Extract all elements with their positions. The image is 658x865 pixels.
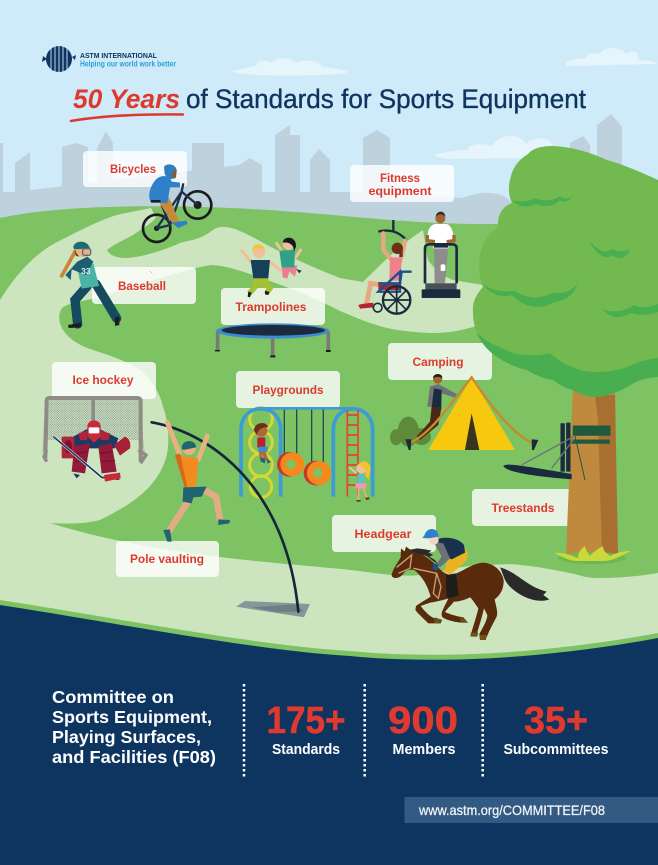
trampoline bbox=[215, 323, 331, 357]
label: Baseball: Baseball bbox=[118, 279, 166, 293]
label: Pole vaulting bbox=[116, 541, 219, 577]
baseball batter bbox=[62, 242, 153, 328]
treadmill runner bbox=[422, 212, 460, 298]
grass hill bbox=[0, 206, 658, 670]
committee name: Committee on bbox=[52, 687, 174, 707]
pole vault pole and mat bbox=[152, 422, 310, 617]
title bbox=[71, 84, 586, 121]
horse body bbox=[392, 547, 504, 639]
light walking path bbox=[0, 208, 658, 670]
pole vaulter bbox=[163, 423, 230, 542]
foliage bbox=[473, 146, 658, 397]
children jumping bbox=[242, 238, 302, 297]
label: Headgear: Headgear bbox=[354, 527, 412, 541]
stat: 35+ Subcommittees bbox=[504, 700, 608, 758]
stat: 175+ Standards: 175+ bbox=[266, 700, 346, 742]
logo: ASTM International bbox=[42, 46, 176, 72]
label: Camping: Camping bbox=[412, 355, 464, 369]
label: Camping bbox=[388, 343, 492, 380]
label: Treestands: Treestands bbox=[492, 501, 555, 515]
wheelchair athlete bbox=[358, 220, 412, 314]
website link bar: www.astm.org/COMMITTEE/F08 bbox=[418, 802, 605, 818]
website link bar bbox=[404, 797, 658, 823]
stat: 175+ Standards bbox=[266, 700, 346, 758]
stat: 35+ Subcommittees: Subcommittees bbox=[504, 741, 608, 758]
label: Fitness equipment: equipment bbox=[368, 184, 432, 198]
navy footer background bbox=[0, 600, 658, 865]
camper and tent bbox=[390, 374, 538, 450]
label: Bicycles: Bicycles bbox=[110, 162, 156, 176]
stat: 900 Members bbox=[388, 700, 458, 758]
title: of Standards for Sports Equipment bbox=[186, 84, 586, 114]
horse tail bbox=[500, 567, 549, 601]
foliage shadow bbox=[477, 333, 658, 397]
skyline bbox=[0, 114, 622, 230]
committee name bbox=[52, 687, 216, 767]
label: Ice hockey bbox=[52, 362, 156, 399]
hockey goalie and net bbox=[42, 398, 146, 482]
jockey on horse bbox=[392, 529, 549, 640]
red underline bbox=[71, 114, 183, 121]
label: Fitness equipment bbox=[350, 165, 454, 202]
cyclist on bicycle bbox=[143, 164, 211, 242]
label: Bicycles bbox=[83, 151, 187, 187]
clouds bbox=[232, 48, 658, 159]
committee name: and Facilities (F08) bbox=[52, 747, 216, 767]
stat: 35+ Subcommittees: 35+ bbox=[524, 700, 588, 742]
title: 50 Years bbox=[73, 84, 180, 114]
label: Trampolines: Trampolines bbox=[236, 300, 307, 314]
tree trunk bbox=[566, 385, 618, 555]
stat: 900 Members: 900 bbox=[388, 700, 458, 742]
playground bbox=[241, 408, 373, 502]
dotted dividers bbox=[244, 684, 483, 777]
grass tuft bbox=[554, 546, 631, 564]
label: Playgrounds: Playgrounds bbox=[252, 383, 324, 397]
sky background bbox=[0, 0, 658, 300]
foliage scallops bbox=[483, 196, 658, 317]
baseball batter: 33 bbox=[81, 266, 91, 276]
committee name: Playing Surfaces, bbox=[52, 727, 201, 747]
stat: 900 Members: Members bbox=[392, 741, 456, 758]
label: Headgear bbox=[332, 515, 436, 552]
label: Pole vaulting: Pole vaulting bbox=[130, 552, 204, 566]
label: Trampolines bbox=[221, 288, 325, 325]
label: Baseball bbox=[92, 267, 196, 304]
committee name: Sports Equipment, bbox=[52, 707, 212, 727]
logo: ASTM International: ASTM INTERNATIONAL bbox=[80, 51, 157, 60]
label: Ice hockey: Ice hockey bbox=[72, 373, 134, 387]
label: Playgrounds bbox=[236, 371, 340, 408]
treestand bbox=[503, 423, 610, 480]
label: Treestands bbox=[472, 489, 576, 526]
tree bbox=[473, 146, 658, 564]
label: Fitness equipment: Fitness bbox=[380, 171, 420, 185]
logo: ASTM International: Helping our world work better bbox=[80, 60, 176, 68]
stat: 175+ Standards: Standards bbox=[272, 741, 340, 758]
